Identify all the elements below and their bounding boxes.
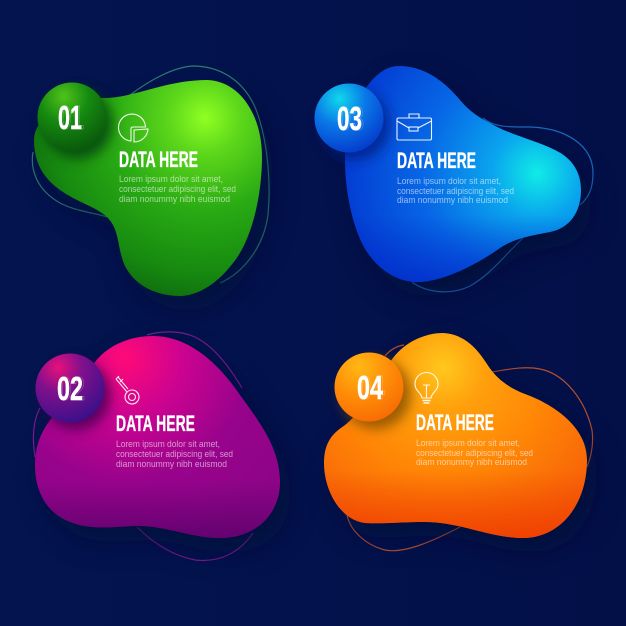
badge: 03 (314, 84, 384, 152)
bottom shading: orange blob (324, 333, 587, 538)
shadow: orange badge (341, 359, 411, 429)
body text: diam nonummy nibh euismod (116, 459, 227, 469)
blob: magenta (35, 336, 280, 538)
badge: 01: 01 (58, 99, 82, 136)
blob: green (34, 80, 262, 296)
body text (416, 438, 533, 467)
blob: orange (324, 333, 587, 538)
body text (119, 174, 236, 204)
heading: DATA HERE (416, 410, 494, 435)
badge: 01 (38, 82, 106, 152)
heading: DATA HERE (119, 147, 198, 172)
badge: 04: 04 (358, 369, 385, 406)
body text (397, 176, 514, 205)
icon: pie chart (119, 114, 148, 142)
shadow: magenta badge (41, 360, 111, 430)
badge: 02 (36, 354, 104, 422)
body text: Lorem ipsum dolor sit amet, (397, 176, 501, 186)
icon: key (116, 376, 139, 404)
badge: 03: 03 (338, 100, 364, 137)
badge: 03: 03 (337, 100, 362, 137)
panel: 02 magenta (33, 332, 290, 560)
panel: 01 green (32, 66, 272, 310)
icon: light bulb (415, 372, 438, 403)
badge: 01: 01 (59, 99, 84, 136)
outline: orange blob contour (347, 345, 593, 551)
body text: Lorem ipsum dolor sit amet, (119, 174, 223, 184)
blob: blue (345, 66, 581, 282)
shadow: blue blob (355, 80, 591, 296)
body text: Lorem ipsum dolor sit amet, (416, 438, 520, 448)
body text: consectetuer adipiscing elit, sed (116, 449, 233, 459)
bottom shading: magenta blob (35, 336, 280, 538)
body text: diam nonummy nibh euismod (416, 457, 527, 467)
icon: briefcase (397, 114, 432, 140)
heading: DATA HERE (397, 148, 476, 173)
badge: 04: 04 (357, 369, 383, 406)
panel: 04 orange (324, 333, 597, 552)
shadow: magenta blob (45, 350, 290, 552)
body text (116, 439, 233, 469)
shadow: green blob (44, 94, 272, 310)
body text: diam nonummy nibh euismod (119, 194, 230, 204)
body text: diam nonummy nibh euismod (397, 195, 508, 205)
body text: consectetuer adipiscing elit, sed (119, 184, 236, 194)
bottom shading: blue blob (345, 66, 581, 282)
body text: consectetuer adipiscing elit, sed (416, 448, 533, 458)
badge: 02: 02 (57, 370, 83, 407)
heading: DATA HERE (116, 411, 195, 436)
body text: consectetuer adipiscing elit, sed (397, 186, 514, 196)
badge: 02: 02 (58, 370, 85, 407)
shadow: orange blob (334, 347, 597, 552)
outline: blue blob contour (412, 118, 593, 292)
shadow: blue badge (320, 90, 390, 160)
outline: magenta blob contour (33, 332, 253, 560)
body text: Lorem ipsum dolor sit amet, (116, 439, 220, 449)
shadow: green badge (43, 89, 113, 159)
panel: 03 blue (314, 66, 593, 296)
outline: green blob contour (32, 66, 269, 283)
badge: 04 (334, 352, 404, 422)
